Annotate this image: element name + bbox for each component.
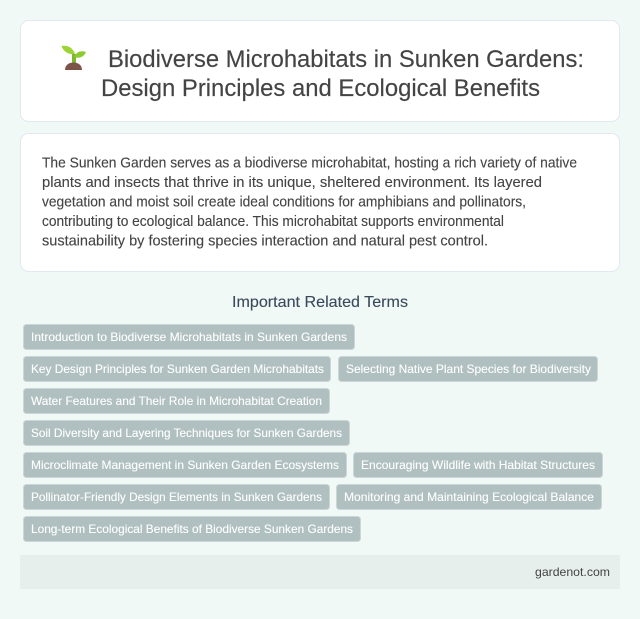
tag [336,484,602,510]
tag: Monitoring and Maintaining Ecological Balance [344,490,594,504]
title [101,46,584,102]
tag [24,452,346,478]
text block: description: plants and insects that thrive in its unique, sheltered environment. Its layered [42,175,542,191]
footer: gardenot.com [535,565,610,579]
heading: related terms: Important Related Terms [232,294,408,311]
tag: Key Design Principles for Sunken Garden Microhabitats [31,362,324,376]
footer [20,555,620,589]
tag: Pollinator-Friendly Design Elements in Sunken Gardens [31,490,322,504]
tag: Water Features and Their Role in Microhabitat Creation [31,394,322,408]
text block: description: The Sunken Garden serves as a biodiverse microhabitat, hosting a rich variety of native [42,156,577,172]
tag list [24,324,602,542]
tag: Long-term Ecological Benefits of Biodiverse Sunken Gardens [31,522,353,536]
panel: title card [20,20,620,122]
text block: description [42,156,577,250]
tag [354,452,602,478]
text block: description: contributing to ecological balance. This microhabitat supports environmental [42,214,504,230]
tag: Selecting Native Plant Species for Biodiversity [346,362,591,376]
tag [24,356,330,382]
icon: seedling [62,46,86,70]
tag [338,356,598,382]
panel: description [20,134,620,272]
tag: Introduction to Biodiverse Microhabitats in Sunken Gardens [31,330,347,344]
tag: Encouraging Wildlife with Habitat Structures [361,458,595,472]
text block: description: vegetation and moist soil create ideal conditions for amphibians and pollinators, [42,194,526,210]
tag: Microclimate Management in Sunken Garden Ecosystems [31,458,339,472]
tag: Soil Diversity and Layering Techniques for Sunken Gardens [31,426,342,440]
tag [24,324,354,350]
tag [24,516,360,542]
tag [24,420,350,446]
title: Biodiverse Microhabitats in Sunken Gardens: [108,46,584,73]
tag [24,484,330,510]
text block: description: sustainability by fostering species interaction and natural pest control. [42,234,488,250]
title: Design Principles and Ecological Benefits [101,75,540,102]
tag [24,388,330,414]
